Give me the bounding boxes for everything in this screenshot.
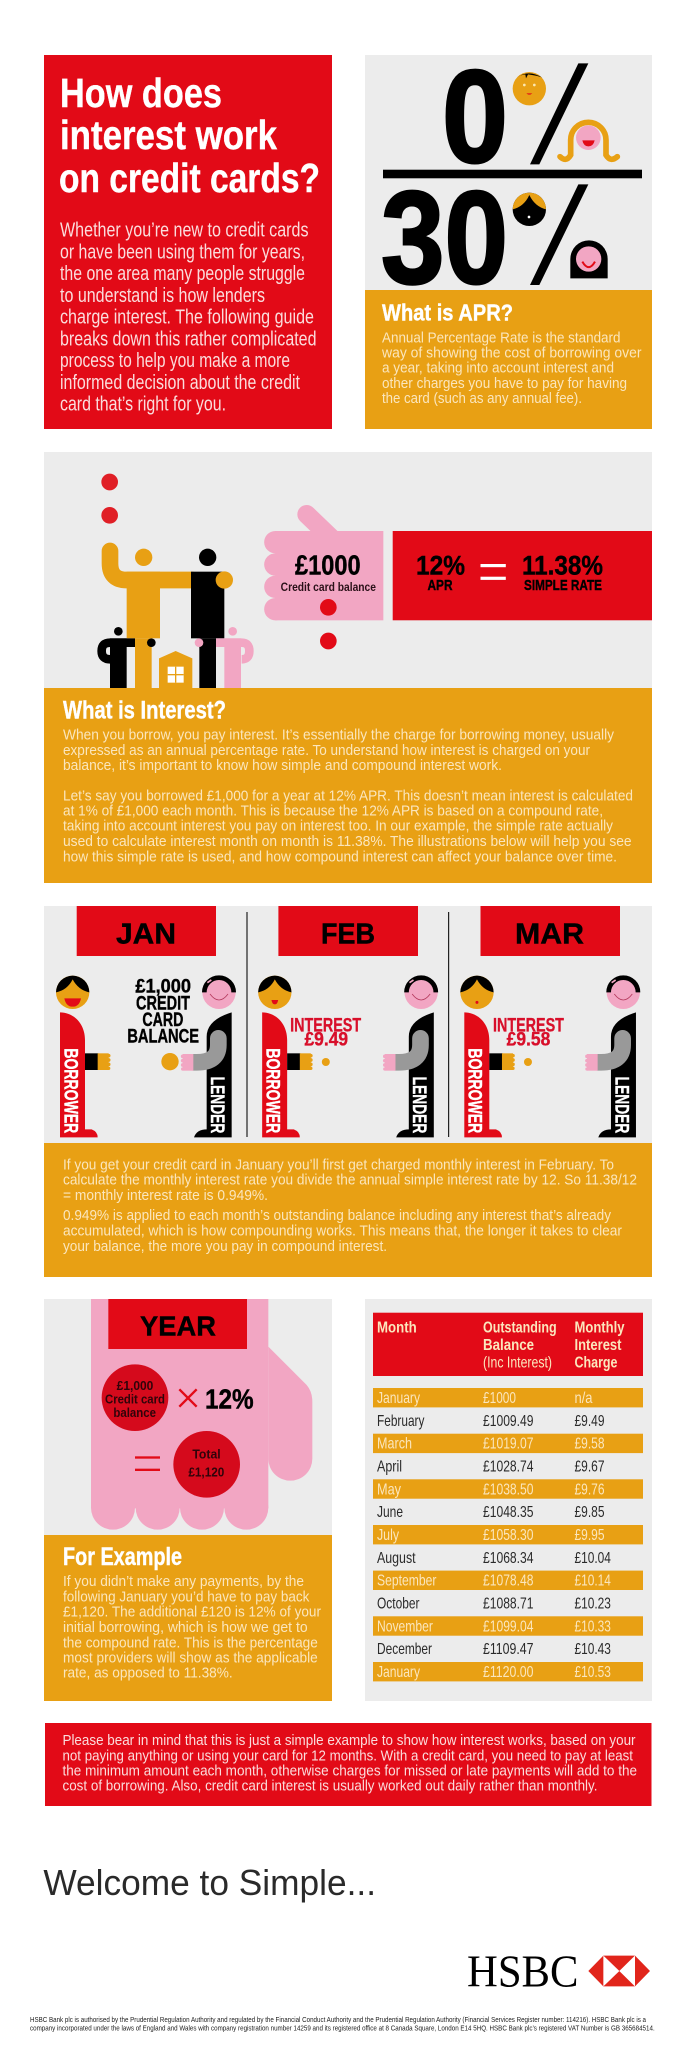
illustration: February borrower and lender: £9.49 <box>304 1030 348 1051</box>
APR text box <box>365 290 652 429</box>
illustration: January borrower and lender <box>56 976 236 1137</box>
panel: year example <box>44 1299 332 1701</box>
title: How does <box>60 70 222 116</box>
table rows: £10.33 <box>574 1618 611 1635</box>
monthly rate text box: accumulated, which is how compounding works. This means that, the longer it takes to clear <box>63 1223 622 1240</box>
example text box: For Example <box>63 1543 182 1571</box>
table header: (Inc Interest) <box>483 1354 552 1371</box>
callout: disclaimer note: cost of borrowing. Also, credit card interest is usually worked out daily rather than monthly. <box>62 1778 598 1795</box>
illustration: hand with balance: Credit card balance <box>281 580 376 594</box>
interest text box: When you borrow, you pay interest. It’s essentially the charge for borrowing money, usually <box>63 726 614 743</box>
table header: Month <box>377 1319 417 1336</box>
tagline: Welcome to Simple... <box>43 1862 376 1903</box>
table rows: February <box>377 1413 424 1430</box>
title <box>59 70 320 201</box>
table header: Outstanding <box>483 1319 557 1336</box>
table rows: £9.85 <box>574 1504 605 1521</box>
interest text box: how this simple rate is used, and how compound interest can affect your balance over time. <box>63 848 617 865</box>
panel: introduction <box>44 55 332 429</box>
title: on credit cards? <box>59 155 320 201</box>
big 30 percent: 30 <box>381 164 508 311</box>
example text box: the compound rate. This is the percentage <box>63 1634 318 1651</box>
HSBC logo: HSBC <box>467 1947 578 1997</box>
HSBC logo <box>467 1947 650 1997</box>
interest text box: used to calculate interest month on month is 11.38%. The illustrations below will help you see <box>63 833 632 850</box>
panel: what is APR <box>365 43 652 429</box>
monthly rate text box: your balance, the more you pay in compound interest. <box>63 1238 387 1255</box>
table header: Charge <box>574 1354 618 1371</box>
illustration: hand with year calculation: £1,120 <box>188 1465 224 1480</box>
example text box: initial borrowing, which is how we get to <box>63 1619 308 1636</box>
table header: Monthly <box>574 1319 625 1336</box>
illustration: March borrower and lender: £9.58 <box>507 1030 551 1051</box>
rate equation banner: 11.38% <box>522 550 603 580</box>
intro text: charge interest. The following guide <box>60 307 314 329</box>
table rows: £1048.35 <box>483 1504 534 1521</box>
rate equation banner: APR <box>428 577 453 594</box>
fraction bar <box>383 170 642 178</box>
illustration: March borrower and lender: BORROWER <box>464 1048 485 1133</box>
rate equation banner: 12% <box>416 550 465 580</box>
table rows: £1028.74 <box>483 1458 534 1476</box>
table rows: £1019.07 <box>483 1436 534 1453</box>
intro text: the one area many people struggle <box>60 263 305 285</box>
interest text box: expressed as an annual percentage rate. To understand how interest is charged on your <box>63 742 590 759</box>
heading: MAR <box>480 906 620 956</box>
table rows: August <box>377 1550 416 1567</box>
monthly rate text box: 0.949% is applied to each month’s outstanding balance including any interest that’s already <box>63 1207 611 1224</box>
illustration: March borrower and lender: INTEREST <box>493 1016 564 1037</box>
table rows: £1120.00 <box>483 1664 534 1681</box>
rate equation banner: SIMPLE RATE <box>524 577 602 594</box>
illustration: January borrower and lender: £1,000 <box>135 977 191 998</box>
table rows: October <box>377 1596 420 1612</box>
title: interest work <box>60 112 277 158</box>
illustration: January borrower and lender: LENDER <box>206 1077 227 1133</box>
intro text: or have been using them for years, <box>60 242 305 264</box>
illustration: March borrower and lender <box>460 976 640 1137</box>
illustration: hand with year calculation: balance <box>113 1406 156 1420</box>
interest text box: taking into account interest you pay on interest too. In our example, the simple rate actually <box>63 818 613 835</box>
table rows: £10.04 <box>574 1550 611 1567</box>
intro text: card that’s right for you. <box>60 394 226 416</box>
table rows: £9.76 <box>574 1481 605 1498</box>
table rows: September <box>377 1573 437 1590</box>
illustration: March borrower and lender: LENDER <box>610 1077 631 1133</box>
table rows: December <box>377 1641 432 1658</box>
heading: FEB: FEB <box>321 918 375 950</box>
APR text box: other charges you have to pay for having <box>382 375 627 392</box>
table rows: £1009.49 <box>483 1413 534 1430</box>
table rows: £1038.50 <box>483 1481 534 1498</box>
example text box: rate, as opposed to 11.38%. <box>63 1664 233 1681</box>
monthly rate text box <box>44 1143 652 1277</box>
APR text box: way of showing the cost of borrowing over <box>381 344 642 362</box>
table rows: January <box>377 1664 420 1681</box>
illustration: hand with year calculation: £1,000 <box>117 1379 153 1393</box>
callout: disclaimer note: the minimum amount each month, otherwise charges for missed or late payments will add to the <box>62 1762 637 1779</box>
table rows: March <box>377 1436 412 1453</box>
table rows: £1078.48 <box>483 1573 534 1590</box>
APR text box: Annual Percentage Rate is the standard <box>382 329 620 346</box>
interest text box: Let’s say you borrowed £1,000 for a year at 12% APR. This doesn’t mean interest is calculated <box>63 787 633 804</box>
table rows: £1058.30 <box>483 1527 534 1544</box>
faces and slashes <box>513 63 617 285</box>
illustration: February borrower and lender: LENDER <box>408 1077 429 1133</box>
table rows: £10.14 <box>574 1573 611 1590</box>
interest text box: balance, it’s important to know how simple and compound interest work. <box>63 757 502 774</box>
APR text box: a year, taking into account interest and <box>382 360 614 377</box>
monthly rate text box: If you get your credit card in January you’ll first get charged monthly interest in February. To <box>63 1156 614 1173</box>
table rows: £1000 <box>483 1390 516 1407</box>
intro text: breaks down this rather complicated <box>60 328 316 350</box>
table rows: January <box>377 1390 420 1407</box>
table rows: June <box>377 1504 403 1521</box>
table rows: £10.53 <box>574 1664 611 1681</box>
example text box: following January you’d have to pay back <box>63 1589 310 1606</box>
illustration: February borrower and lender: BORROWER <box>261 1048 282 1133</box>
table rows: November <box>377 1618 433 1635</box>
example text box: most providers will show as the applicable <box>63 1649 318 1666</box>
table rows: April <box>377 1458 402 1476</box>
intro text: Whether you’re new to credit cards <box>60 220 308 242</box>
intro text: process to help you make a more <box>60 350 290 372</box>
monthly rate text box: calculate the monthly interest rate you divide the annual simple interest rate by 12. So 11.38/12 <box>63 1172 637 1189</box>
table rows: £9.49 <box>574 1413 605 1430</box>
illustration: hand with year calculation: Total <box>192 1446 221 1461</box>
interest text box: What is Interest? <box>63 696 226 724</box>
example text box <box>44 1535 332 1701</box>
table header: Balance <box>483 1337 534 1354</box>
illustration: January borrower and lender: CARD <box>142 1010 183 1031</box>
table rows: n/a <box>574 1390 593 1407</box>
callout: disclaimer note: Please bear in mind that this is just a simple example to show how interest works, based on your <box>62 1732 636 1749</box>
panel: monthly timeline <box>44 906 652 1277</box>
illustration: hand with balance <box>264 514 383 649</box>
illustration: hand with year calculation: 12% <box>205 1383 254 1414</box>
illustration: hand with year calculation: Credit card <box>105 1393 165 1407</box>
table rows: £1099.04 <box>483 1618 534 1635</box>
illustration: hand with year calculation <box>91 1299 312 1530</box>
callout: disclaimer note: not paying anything or using your card for 12 months. With a credit card, you need to pay at least <box>62 1747 634 1764</box>
heading: FEB <box>278 906 418 956</box>
table rows <box>373 1388 643 1681</box>
heading: JAN: JAN <box>116 918 176 950</box>
table rows: £9.58 <box>574 1436 605 1453</box>
example text box: If you didn’t make any payments, by the <box>63 1573 304 1590</box>
illustration: January borrower and lender: CREDIT <box>136 993 190 1014</box>
illustration: February borrower and lender <box>258 976 438 1137</box>
example text box: £1,120. The additional £120 is 12% of your <box>63 1604 321 1621</box>
table rows: £1068.34 <box>483 1550 534 1567</box>
table rows: July <box>377 1527 399 1544</box>
interest text box <box>44 688 652 883</box>
APR text box: the card (such as any annual fee). <box>382 390 582 407</box>
monthly rate text box: = monthly interest rate is 0.949%. <box>63 1187 268 1204</box>
table rows: £1088.71 <box>483 1596 534 1612</box>
table rows: £9.67 <box>574 1458 605 1476</box>
intro text: to understand is how lenders <box>60 285 265 307</box>
APR text box: What is APR? <box>382 300 513 326</box>
callout: disclaimer note <box>45 1723 652 1806</box>
illustration: January borrower and lender: BALANCE <box>127 1026 199 1047</box>
intro text: informed decision about the credit <box>60 372 300 394</box>
table rows: £10.43 <box>574 1641 611 1658</box>
panel: monthly balance table <box>365 1299 652 1701</box>
heading: JAN <box>77 906 216 956</box>
table rows: £10.23 <box>574 1596 611 1612</box>
panel: what is interest <box>44 452 652 883</box>
table rows: May <box>377 1481 401 1498</box>
illustration: January borrower and lender: BORROWER <box>59 1048 80 1133</box>
table rows: £9.95 <box>574 1527 605 1544</box>
table header: Interest <box>574 1337 622 1354</box>
illustration: February borrower and lender: INTEREST <box>290 1016 361 1037</box>
table header <box>373 1313 643 1376</box>
intro text <box>60 220 316 416</box>
heading: MAR: MAR <box>515 918 584 950</box>
illustration: family and house <box>101 474 249 688</box>
illustration: hand with balance: £1000 <box>295 549 361 580</box>
interest text box: at 1% of £1,000 each month. This is because the 12% APR is based on a compound rate, <box>63 803 603 820</box>
illustration: hand with year calculation: YEAR <box>140 1311 216 1342</box>
table rows: £1109.47 <box>483 1641 534 1658</box>
footer legal text <box>30 2015 655 2032</box>
big 0 percent: 0 <box>442 43 508 190</box>
rate equation banner <box>393 531 652 620</box>
